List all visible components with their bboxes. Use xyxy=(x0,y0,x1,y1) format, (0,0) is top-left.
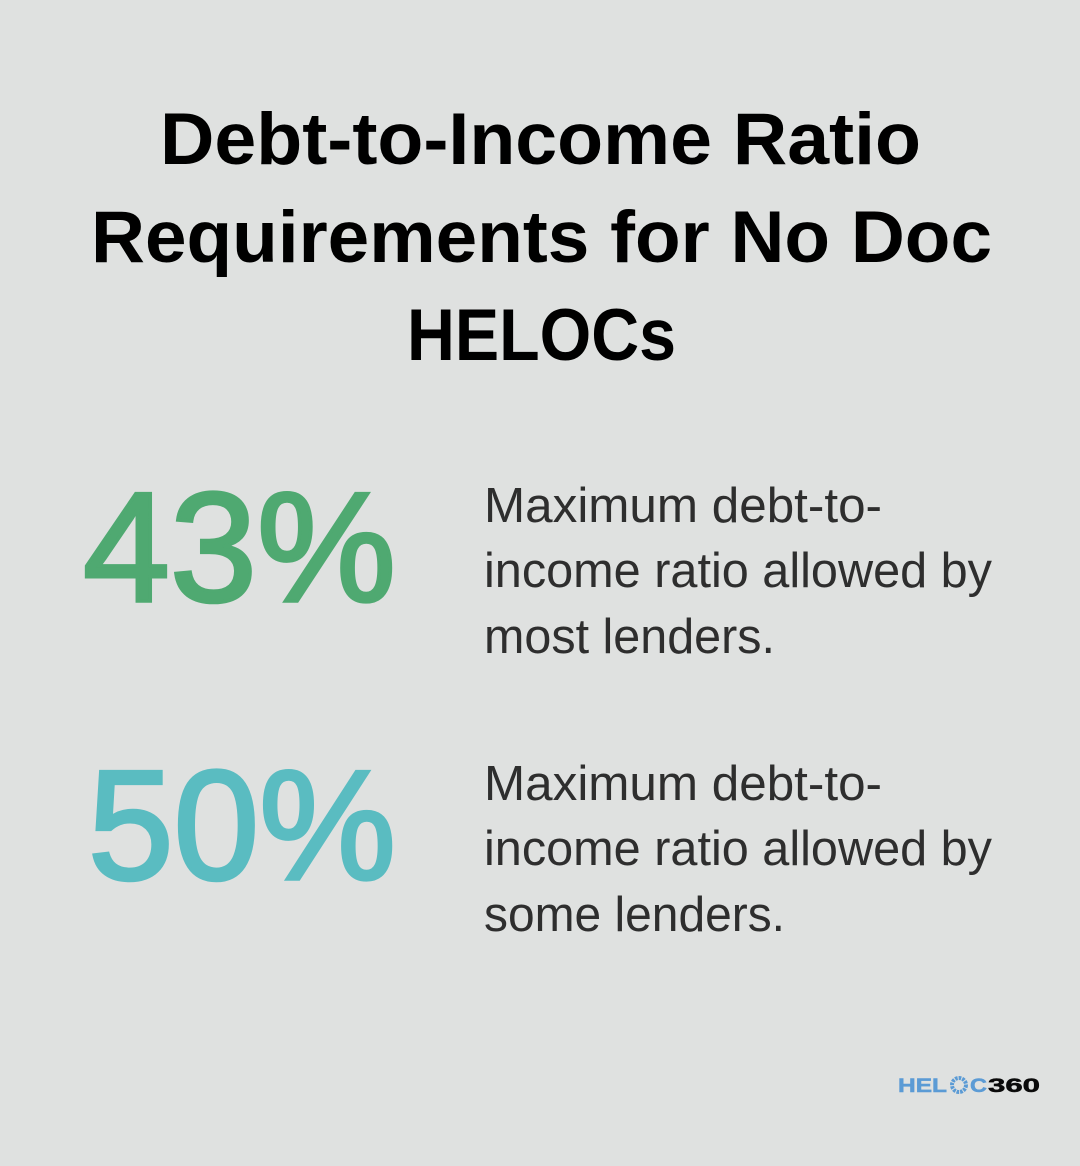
stat description: most lenders: Maximum debt-to- xyxy=(484,479,882,533)
title xyxy=(91,99,992,376)
stat description: some lenders xyxy=(484,757,992,942)
title: Debt-to-Income Ratio xyxy=(160,99,921,180)
stat number: 43%: 43% xyxy=(83,461,396,635)
title: Requirements for No Doc xyxy=(91,197,992,278)
stat: 50% xyxy=(88,739,992,942)
stat number: 50%: 50% xyxy=(88,739,396,913)
stat description: most lenders: income ratio allowed by xyxy=(484,544,992,598)
logo: HELOC360: 360 xyxy=(988,1076,1040,1097)
logo: HELOC360: C xyxy=(970,1076,987,1097)
stat description: some lenders: income ratio allowed by xyxy=(484,822,992,876)
stat description: most lenders: most lenders. xyxy=(484,610,775,664)
logo: HELOC360: HEL xyxy=(898,1076,948,1097)
logo: HELOC360 xyxy=(898,1076,1040,1097)
stat description: some lenders: some lenders. xyxy=(484,888,785,942)
title: HELOCs xyxy=(407,295,676,376)
stat description: some lenders: Maximum debt-to- xyxy=(484,757,882,811)
stat: 43% xyxy=(83,461,992,664)
icon: swirl O xyxy=(952,1078,966,1092)
stat description: most lenders xyxy=(484,479,992,664)
